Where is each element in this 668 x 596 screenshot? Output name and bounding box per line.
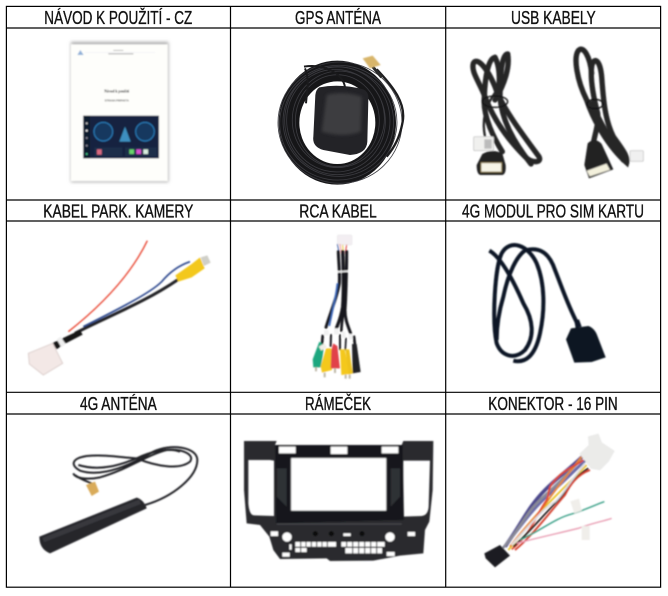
panel: 4g modul pro sim kartu xyxy=(462,201,644,363)
panel: rámeček xyxy=(244,393,433,561)
panel: konektor 16 pin xyxy=(484,393,618,567)
heading: návod k použití: NÁVOD K POUŽITÍ - CZ xyxy=(44,7,192,28)
heading: 4g anténa: 4G ANTÉNA xyxy=(80,393,157,414)
heading: gps anténa: GPS ANTÉNA xyxy=(295,7,381,28)
heading: usb kabely: USB KABELY xyxy=(511,7,596,28)
icon: sim module cable xyxy=(489,245,606,363)
panel: gps anténa xyxy=(269,7,408,191)
icon: rca cable bundle xyxy=(313,235,361,379)
icon: printed manual xyxy=(71,42,168,182)
panel: návod k použití xyxy=(44,7,192,182)
heading: rámeček: RÁMEČEK xyxy=(305,393,371,414)
icon: 16 pin wiring harness xyxy=(484,434,614,567)
icon: printed manual: STRANA PRIPAKTA xyxy=(105,98,129,102)
panel: 4g anténa xyxy=(39,393,197,553)
heading: kabel park. kamery: KABEL PARK. KAMERY xyxy=(43,201,193,222)
icon: 4g antenna xyxy=(39,447,197,553)
panel: kabel park. kamery xyxy=(28,201,211,375)
panel: usb kabely xyxy=(473,7,643,178)
heading: rca kabel: RCA KABEL xyxy=(299,201,377,222)
icon: printed manual: Návod k použití xyxy=(104,89,130,93)
icon: two usb cables xyxy=(473,49,643,178)
icon: coiled gps antenna xyxy=(269,54,408,191)
icon: dashboard frame xyxy=(244,441,433,561)
panel: rca kabel xyxy=(299,201,377,379)
icon: parking camera cable xyxy=(28,241,211,375)
heading: konektor 16 pin: KONEKTOR - 16 PIN xyxy=(488,393,618,414)
